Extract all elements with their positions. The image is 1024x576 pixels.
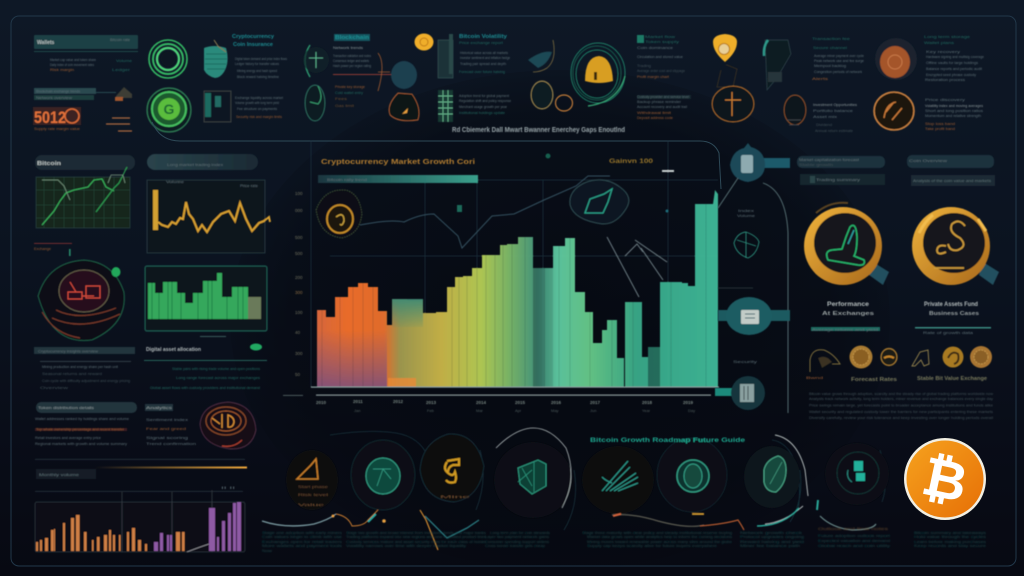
x axis labels: 2016 bbox=[551, 400, 562, 405]
text block: column 3: Transaction validation and nodes bbox=[333, 53, 371, 58]
text block: column 7: Momentum and relative strength bbox=[925, 113, 981, 118]
x axis labels: 2010 bbox=[316, 400, 327, 405]
text block: column 7: Stop loss band bbox=[925, 121, 955, 126]
text block: column 7: Short and long position ratios bbox=[925, 108, 983, 113]
text blocks: bottom captions: Exchanges open for retail traders bbox=[262, 539, 342, 544]
icon: teal shield bbox=[204, 40, 228, 78]
x axis labels: 2013 bbox=[426, 400, 437, 405]
text blocks: bottom captions: More wallets and payment tools bbox=[262, 543, 342, 548]
text block: column 5: Market flow bbox=[645, 34, 675, 39]
text blocks: bottom captions: Learn before making purchases bbox=[914, 539, 986, 544]
y axis labels: 100 bbox=[295, 191, 303, 196]
connector: outer curve bbox=[718, 178, 788, 413]
y axis labels: 500 bbox=[295, 251, 303, 256]
labels: coins bbox=[806, 375, 987, 383]
text block: column 6: Investment Opportunities bbox=[813, 102, 857, 107]
chart: green bars bbox=[145, 266, 267, 337]
small teal markers bbox=[457, 154, 674, 212]
label: lower chart bbox=[36, 469, 235, 490]
icon: orange brain bbox=[200, 402, 256, 449]
icon: gold gateway with rings bbox=[571, 43, 625, 106]
text block: distribution: Regional markets with growth and volume summary bbox=[35, 441, 127, 446]
text block: column 3: Gas limit bbox=[335, 103, 355, 108]
text block: column 5: Deposit address code bbox=[637, 115, 674, 120]
icon: orange outline bulb bbox=[389, 93, 419, 121]
text block: column 6: Mempool backlog bbox=[814, 63, 846, 68]
icon: globe with circuit bbox=[38, 260, 124, 341]
text block: column 6: Alerts bbox=[812, 76, 828, 81]
text block: column 5: Withdrawal limit bbox=[637, 110, 672, 115]
icon: gold triangle: Value bbox=[298, 502, 326, 507]
icon: magnifier green bbox=[804, 203, 889, 285]
text block: column 5: Coin dominance bbox=[637, 45, 674, 50]
divider and gold accent bbox=[35, 459, 247, 468]
horizontal lead line bbox=[718, 287, 753, 289]
labels: coins: Forecast Rates bbox=[851, 377, 897, 383]
text block: column 6: Peak network use and fee surge bbox=[814, 58, 865, 63]
text block: column 4: Adoption trend for global payment bbox=[459, 93, 510, 98]
icon: teal leaf circle bbox=[351, 440, 415, 510]
label: node two: Index bbox=[738, 208, 754, 213]
text block: column 2: Block reward halving timeline bbox=[237, 74, 280, 79]
chart: gold line: Volume bbox=[166, 179, 185, 184]
text block: coin notes: Bitcoin value grows through adoption, scarcity and the steady rise of global trading platforms worldwide now bbox=[809, 391, 993, 396]
x axis labels: 2014 bbox=[476, 400, 487, 405]
text block: column 2: Volume growth with long term yield bbox=[235, 100, 279, 105]
icon: bitcoin coin: ₿ bbox=[917, 444, 973, 515]
x axis labels: Feb bbox=[427, 408, 435, 413]
header pill: right bbox=[907, 155, 994, 168]
header pill: lower left two: Token distribution details bbox=[38, 405, 94, 410]
subheader right bbox=[911, 175, 995, 186]
y axis labels: 500 bbox=[295, 235, 303, 240]
text block: brain notes: Sentiment index bbox=[146, 417, 188, 422]
text blocks: bottom captions: Mining moves toward renewable power across many sites around the globe bbox=[587, 539, 733, 544]
decorative orbit arcs bbox=[330, 431, 886, 530]
panel: main chart bbox=[283, 141, 719, 413]
text block: column 4: Historical value across all markets bbox=[460, 50, 508, 55]
pointer lines bbox=[607, 237, 667, 297]
text block: column 7: Balance reports and periodic audit bbox=[926, 66, 983, 71]
x axis labels: 2012 bbox=[393, 399, 404, 404]
panel: top info strip bbox=[33, 34, 985, 133]
chart: gold line bbox=[147, 179, 270, 253]
text block: green notes: Global asset flows with custody providers and institutional demand bbox=[150, 385, 260, 390]
icon: orange disc bbox=[875, 38, 917, 80]
icon: teal gem bbox=[744, 435, 808, 524]
text block: coin notes: Price swings remain large, yet forecasts point to broader acceptance among institutions and funds alike bbox=[809, 402, 994, 408]
text block: wallets notes: Market cap value and token share bbox=[50, 57, 97, 62]
icon: node two leaf bbox=[734, 232, 759, 258]
text blocks: bottom captions: Cross border transfer gets cheap bbox=[485, 543, 546, 548]
text block: coin notes: Diversify carefully, review your risk tolerance and keep investing over longer holding periods overall bbox=[809, 415, 993, 420]
text block: column 5 bbox=[637, 34, 691, 120]
caption: red label: Exchange bbox=[34, 246, 52, 251]
text block: column 3: Fees bbox=[335, 96, 347, 101]
icon: dark crystal bbox=[764, 40, 791, 90]
text blocks: bottom captions: Long term plan for coin stewards bbox=[490, 530, 550, 535]
header bar: lower left bbox=[34, 347, 135, 354]
text block: wallets notes: Ledger bbox=[112, 67, 131, 72]
top strip frame line bbox=[152, 122, 721, 189]
y axis labels: 200 bbox=[295, 275, 303, 280]
x axis labels: Year bbox=[642, 408, 651, 413]
text blocks: bottom captions: Market data grows open while analytics help to inform the coming decisions bbox=[587, 534, 732, 539]
text block: lower left: Mining production and energy share per hash unit bbox=[42, 364, 119, 369]
caption: magnifier right: Private Assets Fund bbox=[924, 302, 978, 308]
text block: lower left: Overview bbox=[40, 385, 68, 390]
text block: column 2 bbox=[232, 34, 287, 119]
text block: column 7: Offline vaults for large holdings bbox=[926, 60, 978, 65]
text block: green notes: Stable pairs with rising trade volume and open positions bbox=[172, 366, 260, 371]
text block: column 2: Mining energy and hash speed bbox=[237, 68, 277, 73]
text block: distribution: Top whale ownership percentage and recent transfer bbox=[36, 426, 125, 432]
icon: teal feather bbox=[582, 446, 654, 514]
header pill: left bbox=[797, 156, 885, 168]
icon: magnifier gold bbox=[912, 207, 999, 285]
row: coins bbox=[810, 346, 992, 372]
text block: wallets notes bbox=[50, 57, 133, 72]
progress bar bbox=[318, 175, 478, 183]
text block: column 6: Annual return estimate bbox=[815, 128, 854, 133]
text blocks: bottom captions: Trading platforms expand into new regions and new regulated product lines bbox=[346, 534, 486, 539]
text blocks: bottom captions: Bitcoin summary and takeaways bbox=[914, 530, 986, 535]
icon: teal shield circle bbox=[494, 428, 572, 518]
subheader left bbox=[800, 174, 885, 185]
x axis labels: 2015 bbox=[515, 400, 526, 405]
text block: lower left bbox=[40, 361, 131, 390]
text block: column 7: Wallet plans bbox=[924, 40, 954, 45]
icon: green coin: G bbox=[164, 101, 175, 117]
x axis labels: Apr bbox=[515, 408, 522, 413]
text blocks: bottom captions: Layer two payment network gains bbox=[485, 534, 549, 539]
text block: column 5: Trading bbox=[637, 63, 651, 68]
icon: green coin bbox=[147, 88, 191, 132]
label: node three: Security bbox=[733, 359, 757, 364]
text block: distribution: Retail investors and average entry price bbox=[35, 435, 102, 440]
baseline bbox=[311, 386, 719, 388]
chart: green line bbox=[36, 167, 130, 228]
node: bottom bbox=[715, 376, 765, 410]
text block: column 3: Blockchain bbox=[335, 35, 369, 41]
header pill: right: Coin Overview bbox=[909, 158, 947, 163]
text block: column 4: Forecast over future halving bbox=[459, 69, 505, 74]
text block: column 7: Hardware signing and multisig coverage bbox=[926, 54, 985, 59]
caption: magnifier left bbox=[822, 302, 874, 317]
chart frame axes bbox=[311, 141, 718, 387]
text block: column 6: Asset mix bbox=[813, 114, 837, 119]
node: top bbox=[730, 143, 790, 182]
x axis labels: May bbox=[551, 408, 559, 413]
caption: magnifier right: Business Cases bbox=[929, 311, 979, 317]
text blocks: bottom captions: Network growth check bbox=[740, 530, 802, 535]
wave connector left bbox=[262, 510, 479, 550]
text blocks: bottom captions: Outlook and final notes bbox=[818, 526, 888, 531]
text blocks: bottom captions: Stage one adoption with early miners bbox=[262, 530, 342, 535]
header pill: chart one bbox=[35, 155, 135, 170]
text blocks: bottom captions: Hold value through the cycles bbox=[914, 534, 986, 539]
text block: column 7: Price discovery bbox=[925, 97, 965, 102]
progress bar: Bitcoin rally trend bbox=[327, 177, 367, 182]
text block: column 4: Bitcoin Volatility bbox=[459, 34, 507, 40]
icon: envelope node bbox=[570, 180, 629, 224]
chart: gold line: Price rate bbox=[240, 183, 259, 188]
header bar: wallets: Wallets bbox=[37, 40, 55, 46]
label: lower chart: II II bbox=[221, 485, 235, 490]
x axis labels: 2019 bbox=[683, 400, 694, 405]
icon: gold pin bbox=[713, 34, 737, 62]
text block: column 2: Fee structure on payments bbox=[237, 106, 277, 111]
icon: bitcoin coin bbox=[904, 438, 986, 520]
text blocks: bottom captions: Reward halving and yield bbox=[740, 539, 804, 544]
text block: column 3: Private key storage bbox=[335, 84, 366, 89]
text block: wallets notes: Risk margin bbox=[50, 67, 74, 72]
accent lines: Average returns and yield bbox=[812, 327, 878, 332]
x axis labels: Jun bbox=[590, 408, 596, 413]
text block: lower left: Coin cycle with difficulty adjustment and energy pricing bbox=[42, 378, 130, 383]
x axis labels: 2018 bbox=[642, 400, 653, 405]
text block: column 3: Cold wallet entry bbox=[335, 90, 363, 95]
text block: column 2: Coin Insurance bbox=[233, 42, 273, 48]
icon: dark bulb bbox=[305, 85, 325, 121]
header pill: left: Market capitalization forecast bbox=[799, 157, 860, 162]
header bar: wallets: Bitcoin rate bbox=[110, 37, 131, 42]
chart title: Cryptocurrency Market Growth Cori bbox=[321, 157, 475, 166]
text block: column 4: Merchant usage growth per year bbox=[459, 104, 508, 109]
chart subtitle right: Gainvn 100 bbox=[609, 158, 653, 165]
text blocks: bottom captions: Miner fee balance path bbox=[740, 543, 800, 548]
central dark glow bbox=[230, 70, 890, 570]
text blocks: bottom captions: Expected valuation and demand bbox=[818, 538, 890, 543]
text block: column 5: Account recovery and audit trail bbox=[637, 104, 687, 109]
accent lines bbox=[811, 327, 991, 335]
labels: coins: Stable Bit Value Exchange bbox=[917, 376, 987, 382]
text block: lower left: Seasonal returns and reward bbox=[42, 371, 102, 376]
text blocks: bottom captions: Stage two growth and broad interest from investors, funds and major banks bbox=[346, 530, 486, 535]
text block: column 4: Institutional holdings update bbox=[459, 110, 506, 115]
text block: column 3 bbox=[333, 34, 391, 108]
text block: column 2: Digital token demand and price index flows bbox=[235, 56, 287, 61]
text block: distribution: Wallet addresses ranked by holdings share and volume bbox=[35, 416, 130, 421]
label: node two: Volume bbox=[737, 213, 756, 218]
header bar: wallets bbox=[34, 35, 138, 52]
trend line bbox=[360, 176, 610, 248]
text block: column 2: Security risk and margin limits bbox=[236, 114, 282, 119]
wave connector right bbox=[612, 500, 876, 530]
text block: column 6: Average miner payment over cycle bbox=[814, 53, 865, 58]
bars bbox=[317, 190, 718, 387]
text block: column 6 bbox=[812, 36, 865, 133]
icon: gold triangle: Risk level bbox=[298, 492, 328, 497]
text block: column 2: Exchange liquidity across market bbox=[235, 95, 284, 100]
text blocks: bottom captions: Now bbox=[262, 548, 272, 553]
text blocks: bottom captions: Future adoption outlook report bbox=[818, 533, 891, 538]
subheader left: Trading summary bbox=[816, 177, 860, 182]
icon: green concentric ring bbox=[149, 40, 187, 78]
text block: column 3: Consensus ledger and wallets bbox=[333, 58, 369, 63]
y axis labels: 300 bbox=[295, 351, 303, 356]
y axis labels: 000 bbox=[295, 208, 303, 213]
x axis labels: 2011 bbox=[353, 399, 363, 404]
text block: column 4: Investor sentiment and inflation hedge bbox=[460, 55, 511, 60]
text block: column 7: Restoration process bbox=[925, 77, 965, 82]
orange numeric badge: 5012 bbox=[34, 108, 66, 127]
text block: column 2: Cryptocurrency bbox=[232, 34, 274, 40]
header label with green pill bbox=[146, 344, 262, 353]
header pill: chart two bbox=[147, 154, 258, 170]
text blocks: bottom captions bbox=[262, 526, 987, 553]
text blocks: bottom captions: Consumer spending support widens bbox=[485, 539, 549, 544]
header pill: chart two: Long market trading index bbox=[167, 162, 223, 167]
chart: orange and purple bars bbox=[35, 490, 245, 552]
icon: orange ring bbox=[874, 92, 914, 130]
x axis labels: 2017 bbox=[590, 400, 601, 405]
text blocks: bottom captions: Global reach and coin utility bbox=[818, 543, 890, 548]
text block: column 3: Hash power per region rating bbox=[333, 63, 371, 68]
sub-header bar: Blockchain exchange trends bbox=[36, 88, 80, 94]
text blocks: bottom captions: Custody services mature and asset security rises for each class of holder bbox=[346, 539, 487, 544]
y axis labels: 300 bbox=[295, 290, 303, 295]
text block: column 2: Ledger history for transfer values bbox=[235, 61, 279, 66]
icon: dark terminal box bbox=[204, 91, 231, 122]
text block: column 6: Portfolio balance bbox=[813, 108, 854, 113]
text block: brain notes: Trend confirmation bbox=[146, 441, 196, 446]
orange numeric badge: Supply rate margin value bbox=[34, 126, 81, 131]
icon: outline circles bbox=[531, 81, 572, 111]
header pill: left: Stable growth bbox=[799, 162, 833, 167]
text block: column 4: Trading pair spread and depth bbox=[460, 61, 506, 66]
text block: column 5: Profit margin chart bbox=[637, 74, 670, 79]
text blocks: bottom captions: Keep records and stay secure bbox=[914, 543, 987, 548]
icon: dark bulb outline bbox=[784, 95, 806, 125]
icon: gold coin on chart bbox=[316, 190, 362, 238]
caption: magnifier left: At Exchanges bbox=[822, 311, 874, 317]
text block: column 5: Token supply bbox=[645, 39, 679, 44]
subheader right: Analysis of the coin value and markets bbox=[913, 178, 991, 183]
accent lines: Rate of growth data bbox=[923, 330, 974, 335]
icon: gold S glyph: Mine bbox=[440, 494, 473, 499]
icon: orange outline scale bbox=[712, 65, 754, 122]
text blocks: bottom captions: Stage three maturity with clear policy and steady institutional reserve buying bbox=[582, 530, 732, 535]
panel: right column bbox=[797, 155, 999, 420]
text block: column 5: Backup phrase reminder bbox=[637, 99, 682, 104]
text block: column 4: Price exchange report bbox=[459, 40, 504, 45]
bottom heading: Bitcoin Growth Roadmap Future Guide bbox=[590, 437, 745, 444]
y axis labels bbox=[295, 191, 303, 377]
header pill: chart one: Bitcoin bbox=[37, 161, 61, 167]
header label with green pill: Digital asset allocation bbox=[146, 347, 201, 353]
bar shading overlays bbox=[317, 204, 706, 387]
icon: teal ring bbox=[657, 438, 727, 512]
text block: column 7 bbox=[924, 34, 985, 131]
text block: column 5: Circulation and stored value bbox=[637, 54, 684, 59]
text blocks: bottom captions: Volatility narrows over time with deeper market liquidity bbox=[346, 543, 466, 548]
header pill: lower left two bbox=[36, 402, 137, 413]
icon: connector and blue blob bbox=[378, 53, 417, 91]
label: lower chart: Monthly volume bbox=[39, 472, 80, 477]
icon: gold triangle bbox=[286, 450, 338, 510]
text block: column 6: Secure channel bbox=[813, 45, 847, 50]
icon: gold triangle: Start phase bbox=[298, 484, 329, 489]
y axis labels: 50 bbox=[295, 372, 301, 377]
x axis labels bbox=[283, 394, 711, 413]
text block: column 6: Transaction fee bbox=[812, 36, 851, 41]
icon: blue feather bbox=[528, 40, 554, 72]
text blocks: bottom captions: Coin values begin to climb with use bbox=[262, 534, 343, 539]
text block: green notes bbox=[144, 360, 267, 390]
icon: small chart glyphs bbox=[106, 87, 132, 131]
text block: distribution bbox=[35, 416, 130, 446]
icon: teal bolt node bbox=[825, 443, 889, 505]
text block: column 6: Congestion periods of network bbox=[814, 69, 862, 74]
text block: brain notes: Fear and greed bbox=[146, 426, 186, 431]
text block: column 7: Take profit band bbox=[925, 126, 955, 131]
panel: left dashboard column bbox=[34, 154, 270, 552]
panel: right connector nodes bbox=[715, 143, 790, 413]
text block: column 3: Network trends bbox=[333, 45, 363, 50]
caption: central subtitle: Rd Cbiemerk Dall Mwart Bwanner Enerchey Gaps Enoutlnd bbox=[452, 127, 625, 134]
text block: column 4: Regulation shift and policy response bbox=[459, 98, 512, 103]
x axis labels: Day bbox=[688, 408, 695, 413]
x axis labels: Jan bbox=[354, 408, 360, 413]
text block: coin notes: Wallet security and regulated custody lower the barriers for new participants entering these markets bbox=[809, 409, 993, 414]
node: middle bbox=[718, 297, 790, 335]
text block: column 6: Dividend bbox=[816, 122, 832, 127]
text blocks: bottom captions: Protocol upgrades ongoing bbox=[740, 534, 804, 539]
text block: column 7: Volatility index and moving averages bbox=[925, 103, 983, 108]
icon: tower bbox=[438, 34, 453, 122]
text block: brain notes: Signal scoring bbox=[146, 435, 188, 440]
labels: coins: Bwnd bbox=[806, 375, 823, 380]
icon: gold coin small bbox=[414, 34, 434, 50]
sub-header bar bbox=[34, 88, 116, 100]
text block: green notes: Long range forecast across major exchanges bbox=[176, 375, 260, 380]
text block: column 7: Encrypted seed phrase custody bbox=[926, 72, 976, 77]
text block: coin notes bbox=[809, 391, 994, 420]
text block: column 5: Average order cost and slippage bbox=[637, 68, 686, 73]
y axis labels: 100 bbox=[295, 310, 303, 315]
orange numeric badge bbox=[33, 107, 81, 131]
text block: coin notes: Analysts track network activity, long term holders, miner revenue and exchange balances every single day bbox=[809, 396, 993, 401]
icon: gold S glyph bbox=[420, 434, 484, 502]
icon: green arc sensor bbox=[303, 45, 329, 77]
text block: column 7: Long term storage bbox=[924, 34, 971, 39]
text block: wallets notes: Daily index of coin movement rates bbox=[50, 62, 94, 67]
text block: brain notes bbox=[145, 404, 196, 446]
text block: column 7: Key recovery bbox=[926, 49, 960, 54]
x axis labels: Mar bbox=[476, 408, 484, 413]
sub-header bar: Network overview bbox=[36, 95, 72, 100]
caption: magnifier right bbox=[924, 302, 979, 317]
label: node two bbox=[737, 208, 756, 218]
y axis labels: 40 bbox=[295, 330, 301, 335]
caption: magnifier left: Performance bbox=[827, 302, 870, 308]
text blocks: bottom captions: Supply cap keeps scarcity alive for future buyers everywhere bbox=[587, 543, 718, 548]
text block: wallets notes: Volume bbox=[116, 58, 133, 63]
caption: red label bbox=[34, 243, 72, 256]
header bar: lower left: Cryptocurrency insights overview bbox=[38, 348, 98, 354]
text block: column 4 bbox=[459, 34, 512, 115]
text block: brain notes: Analytics bbox=[146, 405, 172, 410]
text block: column 5: Custody provider and service level bbox=[637, 94, 689, 99]
panel: bottom roadmap bbox=[262, 428, 987, 553]
